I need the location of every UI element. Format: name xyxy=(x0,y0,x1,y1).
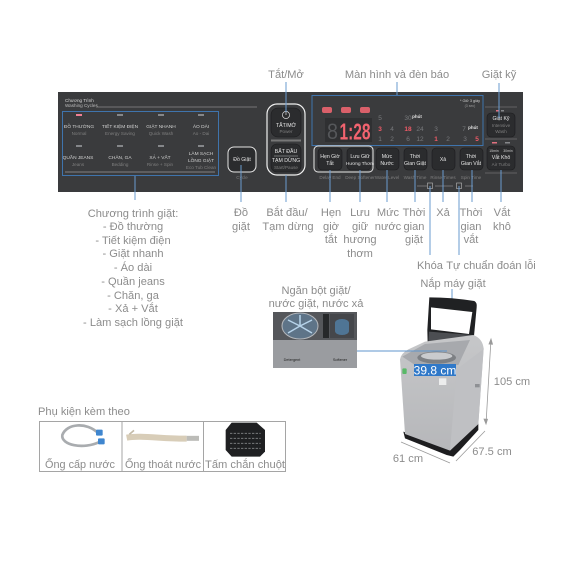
label: detergent drawer: nước giặt, nước xả xyxy=(269,298,364,310)
function buttons: Thời xyxy=(466,154,476,160)
display: 7 xyxy=(462,126,466,133)
dimension: width xyxy=(393,442,450,465)
intensive wash and air turbo buttons xyxy=(485,107,517,173)
label: washing programs list: - Làm sạch lồng giặt xyxy=(83,317,183,329)
intensive wash and air turbo buttons: Wash xyxy=(495,129,507,134)
icon: drain hose xyxy=(127,430,199,439)
program selector xyxy=(62,98,257,176)
display: 30 xyxy=(404,115,412,122)
label: power: Tắt/Mở xyxy=(268,68,304,81)
label: air turbo: khô xyxy=(493,221,511,233)
label: washing programs list: - Áo dài xyxy=(114,261,152,274)
program selector: Washing Cycles xyxy=(65,103,98,108)
label: washing programs list: Chương trình giặt: xyxy=(88,208,178,220)
program selector: LỒNG GIẶT xyxy=(188,157,214,164)
detergent drawer photo: Softener xyxy=(333,358,348,362)
program selector: Ao - Dai xyxy=(193,131,209,136)
program selector: Normal xyxy=(72,131,86,136)
label: detergent drawer xyxy=(269,285,364,310)
label: start pause: Tạm dừng xyxy=(262,221,314,233)
accessory label: supply hose: Ống cấp nước xyxy=(45,457,115,471)
label: washing programs list: - Chăn, ga xyxy=(107,290,160,302)
display: 8 xyxy=(327,119,338,144)
display: 2 xyxy=(446,136,450,143)
function buttons: Hẹn Giờ xyxy=(320,154,340,160)
program selector: CHĂN, GA xyxy=(108,154,132,161)
dimension: depth xyxy=(456,431,512,461)
power and start buttons: Power xyxy=(279,129,293,134)
display: phút xyxy=(412,114,422,119)
function buttons: Tắt xyxy=(326,160,334,167)
function buttons: Gian Giặt xyxy=(404,161,427,167)
label: softener: thơm xyxy=(347,248,373,260)
accessories heading: Phụ kiện kèm theo xyxy=(38,406,130,418)
label: display and indicators: Màn hình và đèn báo xyxy=(345,69,449,81)
label: delay end: tắt xyxy=(325,233,337,246)
display: 5 xyxy=(475,136,479,143)
function buttons: Spin Time xyxy=(461,175,482,180)
label: lock: Khóa xyxy=(417,260,444,272)
display: 3 xyxy=(434,126,438,133)
function buttons: Gian Vắt xyxy=(461,160,482,167)
detergent drawer photo: Detergent xyxy=(284,358,301,362)
label: spin time: Thời xyxy=(460,207,482,219)
cycle button xyxy=(228,147,256,180)
label: spin time: gian xyxy=(461,221,481,233)
display: 24 xyxy=(416,126,424,133)
body xyxy=(400,335,484,451)
label: spin time xyxy=(460,207,482,246)
label: cycle: Đồ xyxy=(234,207,248,219)
dimension: height: 105 cm xyxy=(494,376,530,388)
label: water level: nước xyxy=(375,221,402,233)
display: 3 xyxy=(463,136,467,143)
horizontal link line to drawer xyxy=(357,350,447,352)
program selector: Jeans xyxy=(72,162,85,167)
label: intensive wash: Giặt kỹ xyxy=(482,69,517,81)
machine feet xyxy=(403,423,478,457)
label: rinse: Xả xyxy=(436,207,451,219)
program selector: Eco Tub Clean xyxy=(186,165,217,170)
washing machine xyxy=(400,297,484,457)
function buttons xyxy=(314,146,483,188)
display: 18 xyxy=(404,126,412,133)
label: softener: hương xyxy=(343,234,377,246)
label: air turbo: Vắt xyxy=(494,206,510,219)
intensive wash and air turbo buttons: Intensive xyxy=(492,123,511,128)
icon: rodent guard plate xyxy=(226,423,265,457)
display: 3 xyxy=(378,126,382,133)
intensive wash and air turbo buttons: 15min xyxy=(489,149,499,153)
label: washing programs list xyxy=(83,208,183,329)
display: 4 xyxy=(390,126,394,133)
label: washing programs list: - Quần jeans xyxy=(101,276,165,288)
label: softener: Lưu xyxy=(350,207,370,219)
program selector: ÁO DÀI xyxy=(193,123,209,130)
label: delay end: giờ xyxy=(323,221,339,233)
dimension: width: 61 cm xyxy=(393,453,423,465)
label: water level xyxy=(375,207,402,233)
display: 5 xyxy=(378,115,382,122)
label: wash time xyxy=(403,207,425,246)
display: (3 sec) xyxy=(465,104,475,108)
label: cycle: giặt xyxy=(232,221,250,233)
accessory label: rodent guard: Tấm chắn chuột xyxy=(205,458,285,471)
function buttons: Thời xyxy=(410,154,420,160)
program selector: QUẦN JEANS xyxy=(63,154,93,161)
label: start pause: Bắt đầu/ xyxy=(266,206,309,219)
program selector: Energy Saving xyxy=(105,131,135,136)
function buttons: Rinse Times xyxy=(430,175,456,180)
label: delay end: Hẹn xyxy=(321,207,341,219)
accessory label: drain hose: Ống thoát nước xyxy=(125,457,201,471)
function buttons: Deep Softener xyxy=(345,175,375,180)
program selector: LÀM SẠCH xyxy=(189,150,214,157)
function buttons: Nước xyxy=(380,161,394,167)
display: 1 xyxy=(434,136,438,143)
callout lines xyxy=(135,82,501,303)
label: self diagnosis: Tự chuẩn đoán lỗi xyxy=(446,259,536,272)
dimension: depth: 67.5 cm xyxy=(472,446,512,458)
function buttons: Xả xyxy=(440,157,446,163)
display: 12 xyxy=(416,136,424,143)
display: * Giữ 3 giây xyxy=(460,99,480,103)
function buttons: Hương Thơm xyxy=(346,161,374,166)
intensive wash and air turbo buttons: Vắt Khô xyxy=(492,154,510,161)
label: washing programs list: - Giặt nhanh xyxy=(102,248,164,260)
power and start buttons: BẮT ĐẦU xyxy=(275,147,297,155)
display: phút xyxy=(468,125,478,130)
intensive wash and air turbo buttons: Air Turbo xyxy=(492,162,511,167)
intensive wash and air turbo buttons: 30min xyxy=(503,149,513,153)
accessories table xyxy=(40,421,286,472)
program selector: Quick Wash xyxy=(149,131,174,136)
display: 2 xyxy=(390,136,394,143)
label: delay end xyxy=(321,207,341,246)
label: softener: giữ xyxy=(352,221,369,233)
label: washer lid: Nắp máy giặt xyxy=(420,277,486,290)
label: wash time: Thời xyxy=(403,207,425,219)
program selector: Bedding xyxy=(112,162,129,167)
label: cycle xyxy=(232,207,250,233)
control panel xyxy=(58,92,523,192)
program selector: ĐỒ THƯỜNG xyxy=(64,123,94,130)
cycle button: Cycle xyxy=(236,175,248,180)
function buttons: Wash Time xyxy=(404,175,427,180)
display xyxy=(312,96,483,146)
label: detergent drawer: Ngăn bột giặt/ xyxy=(281,285,351,297)
label: washing programs list: - Xả + Vắt xyxy=(108,302,158,315)
icon: water supply hose xyxy=(62,425,105,446)
cycle button: Đồ Giặt xyxy=(233,157,251,163)
drum diameter label: 39.8 cm xyxy=(414,364,456,378)
program selector: TIẾT KIỆM ĐIỆN xyxy=(102,122,139,130)
label: washing programs list: - Tiết kiệm điện xyxy=(95,235,171,247)
program selector: Rinse + Spin xyxy=(147,162,174,167)
function buttons: Delay End xyxy=(319,175,341,180)
function buttons: Lưu Giữ xyxy=(350,154,370,160)
intensive wash and air turbo buttons: Giặt Kỹ xyxy=(492,116,510,122)
label: washing programs list: - Đồ thường xyxy=(103,221,163,233)
label: spin time: vắt xyxy=(464,233,478,246)
label: water level: Mức xyxy=(377,207,400,219)
label: air turbo xyxy=(493,206,511,233)
label: wash time: giặt xyxy=(405,234,423,246)
detergent drawer photo xyxy=(273,312,357,368)
label: softener xyxy=(343,207,377,260)
program selector: Chương Trình xyxy=(65,98,94,103)
function buttons: Mức xyxy=(382,154,393,160)
label: start pause xyxy=(262,206,314,233)
lid xyxy=(427,297,477,349)
program selector: GIẶT NHANH xyxy=(146,123,176,130)
program selector: XẢ + VẮT xyxy=(149,153,171,161)
power and start buttons: TẠM DỪNG xyxy=(272,157,300,164)
display: 1 xyxy=(378,136,382,143)
label: wash time: gian xyxy=(404,221,424,233)
power and start buttons: TẮT/MỞ xyxy=(276,121,297,129)
display: 1:28 xyxy=(340,118,371,144)
power and start buttons: Start/Pause xyxy=(274,165,298,170)
dimension: height xyxy=(484,339,530,424)
display: 6 xyxy=(406,136,410,143)
power and start buttons xyxy=(267,104,305,175)
function buttons: Water Level xyxy=(375,175,399,180)
